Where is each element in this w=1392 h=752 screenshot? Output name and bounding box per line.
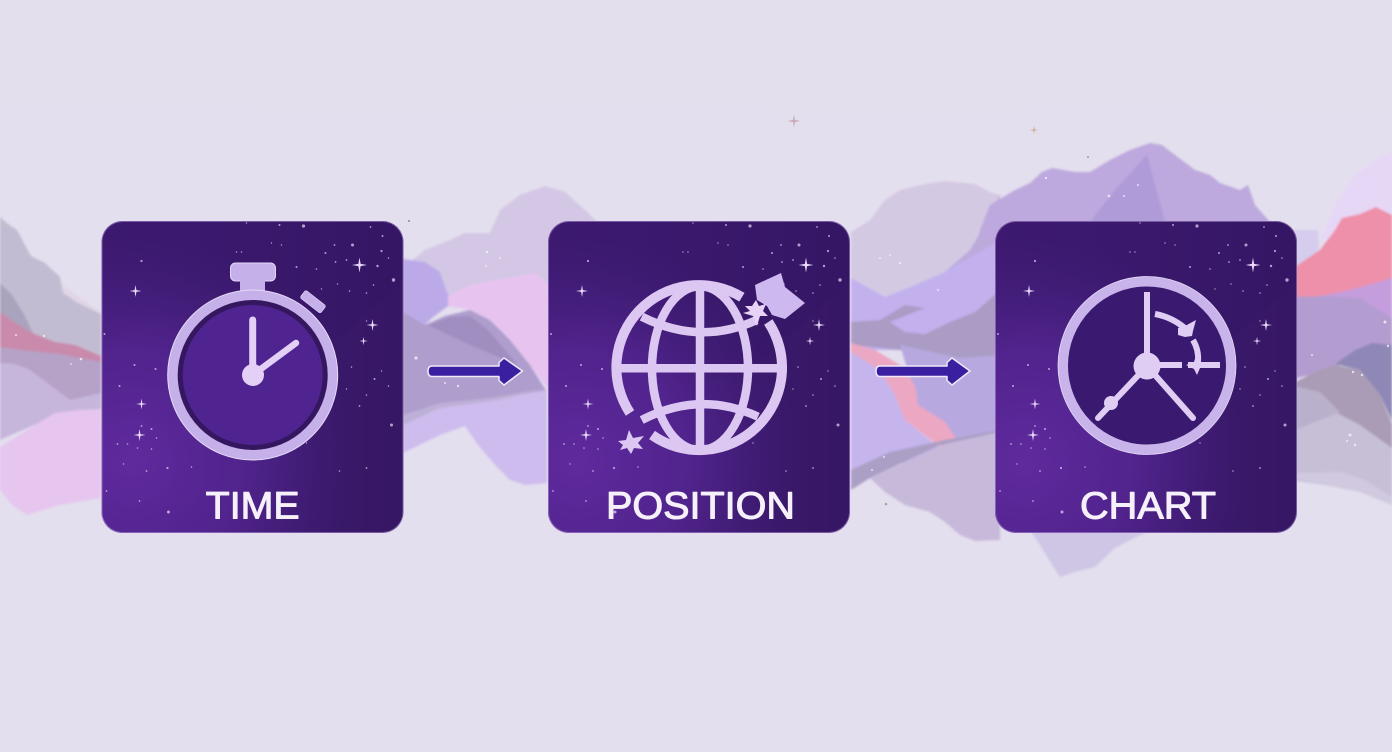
icon: lower star — [618, 430, 644, 454]
panel: position — [548, 221, 850, 533]
arrow: time to position — [428, 358, 522, 385]
mountain landscape: right — [1290, 152, 1392, 505]
label: POSITION: POSITION — [606, 485, 795, 527]
icon: upper chart star — [1178, 320, 1196, 337]
mountain landscape: top ridge — [980, 143, 1275, 240]
icon: stopwatch — [168, 263, 338, 460]
icon: globe — [616, 273, 805, 454]
icon: right chart star — [1186, 352, 1208, 375]
icon: upper star — [743, 300, 768, 326]
icon: astrological chart wheel — [1058, 276, 1236, 454]
panel: chart — [995, 221, 1297, 533]
arrow: position to chart — [876, 358, 970, 385]
label: TIME: TIME — [206, 485, 300, 527]
icon: shield marker — [755, 273, 805, 319]
mountain landscape: left — [0, 217, 101, 515]
mountain landscape: middle right — [851, 181, 1150, 577]
panel: time — [102, 221, 404, 533]
mountain landscape: middle left — [403, 186, 600, 485]
label: CHART: CHART — [1080, 485, 1216, 527]
background star dust — [15, 177, 1389, 471]
decorative sparkle specks — [408, 114, 1089, 505]
